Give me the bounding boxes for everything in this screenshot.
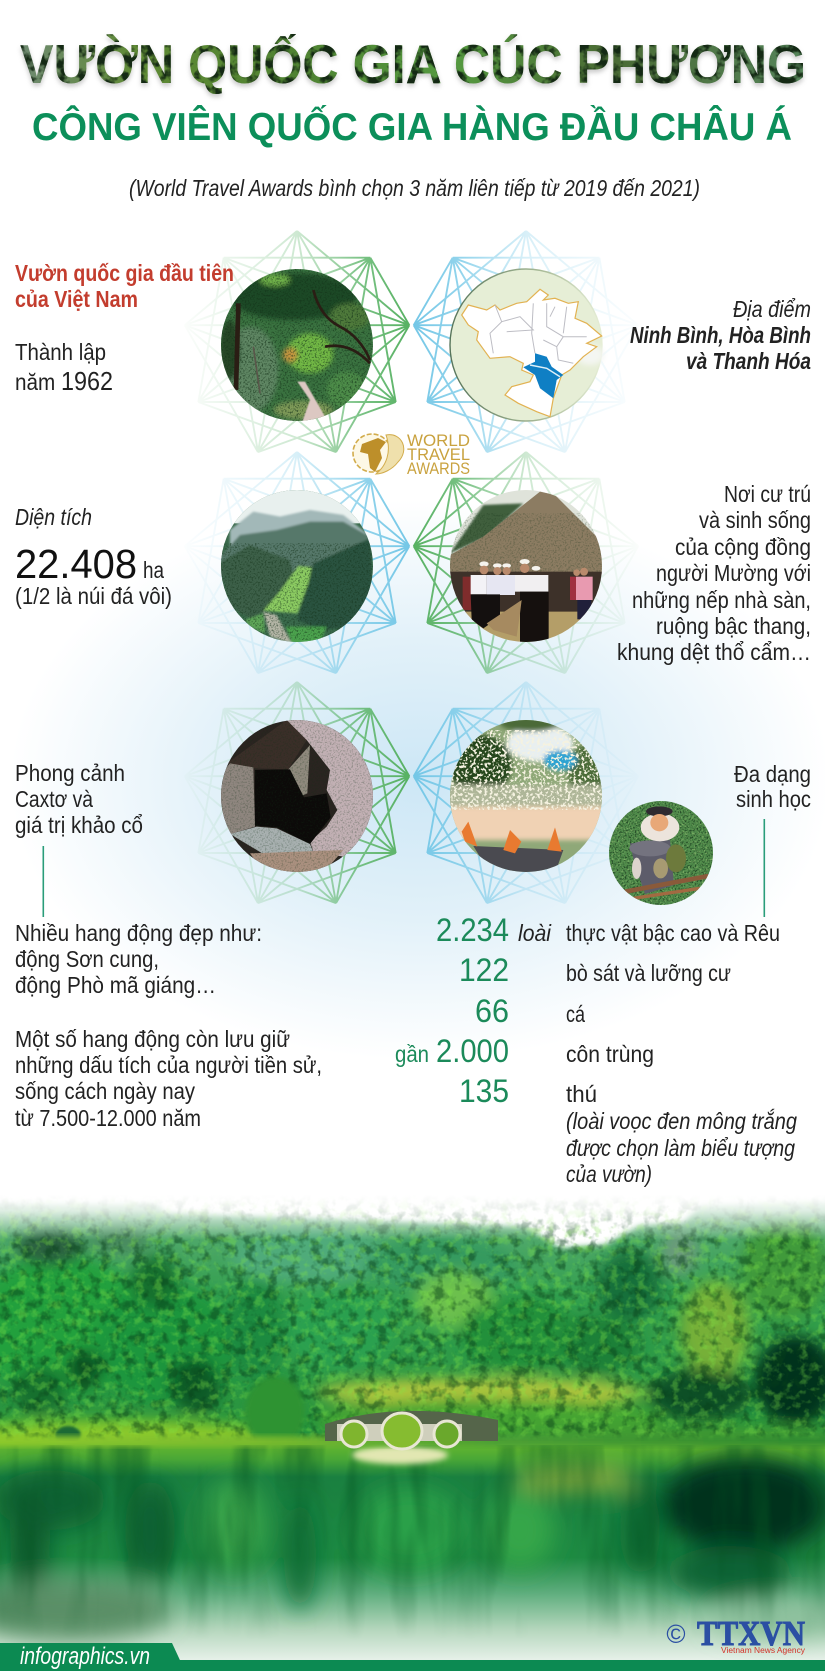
text block: first national park [15, 260, 234, 312]
species numbers: 2.000 [436, 1033, 509, 1069]
stalactites [288, 745, 310, 797]
text block: caves: động Sơn cung, [15, 946, 159, 972]
species labels: cá [566, 1001, 585, 1027]
species numbers: loài [518, 920, 552, 946]
footer bar [0, 1643, 825, 1671]
grass bank left [0, 1420, 280, 1452]
star pattern: row 1 left [185, 231, 409, 452]
logo: World Travel Awards: TRAVEL [407, 445, 470, 464]
species numbers: 2.234 [436, 912, 509, 948]
photo: red-shanked douc langur [607, 800, 713, 907]
subtitle: CÔNG VIÊN QUỐC GIA HÀNG ĐẦU CHÂU Á [32, 104, 792, 149]
species numbers: 66 [475, 993, 509, 1029]
text block: area [15, 504, 172, 609]
lake water [0, 1441, 825, 1671]
monkey body [630, 840, 674, 894]
logo: TTXVN: Vietnam News Agency [721, 1646, 805, 1655]
text block: first national park: Vườn quốc gia đầu tiên [15, 260, 234, 286]
left wall [218, 763, 255, 834]
white mist at top of photo [0, 1195, 825, 1240]
cave ceiling [227, 720, 307, 769]
logo: World Travel Awards: WORLD [407, 431, 470, 450]
text block: prehistoric traces: Một số hang động còn lưu giữ [15, 1026, 290, 1052]
text block: karst landscape: Phong cảnh [15, 760, 125, 786]
species labels: thú [566, 1081, 597, 1107]
text block: karst landscape: giá trị khảo cổ [15, 812, 143, 838]
text block: prehistoric traces: từ 7.500-12.000 năm [15, 1105, 201, 1131]
photo: forest road [217, 267, 377, 427]
connector line left [42, 846, 44, 917]
map: location of the park [450, 269, 604, 421]
logo: TTXVN: © [666, 1619, 686, 1649]
shoreline blend [0, 1436, 825, 1446]
caption: awards note: (World Travel Awards bình chọn 3 năm liên tiếp từ 2019 đến 2021) [129, 175, 700, 201]
species numbers [395, 912, 552, 1109]
text block: prehistoric traces [15, 1026, 322, 1131]
text block: Muong community: và sinh sống [699, 507, 811, 533]
species labels: bò sát và lưỡng cư [566, 960, 731, 986]
text block: prehistoric traces: những dấu tích của người tiền sử, [15, 1052, 322, 1078]
text block: Muong community: Nơi cư trú [724, 481, 811, 507]
logo emblem [353, 434, 404, 474]
text block: first national park: của Việt Nam [15, 286, 138, 312]
star pattern: row 2 right [414, 452, 638, 673]
text block: prehistoric traces: sống cách ngày nay [15, 1078, 195, 1104]
hillside [450, 503, 523, 553]
text block: location: Địa điểm [733, 296, 811, 322]
footer source text: infographics.vn [20, 1643, 150, 1670]
species labels: (loài voọc đen mông trắng [566, 1108, 797, 1134]
text block: karst landscape: Caxtơ và [15, 786, 93, 812]
logo: World Travel Awards [353, 431, 470, 478]
text block: area: ha [143, 557, 164, 583]
text block: area: (1/2 là núi đá vôi) [15, 583, 172, 609]
ground [250, 850, 344, 872]
photo: Muong stilt house and people [447, 487, 607, 647]
cave floor rocks [230, 827, 314, 854]
footer tab [0, 1643, 185, 1671]
yellow-green hedge [315, 1378, 645, 1406]
text block: founded: năm 1962 [15, 366, 113, 396]
star pattern: row 3 left [185, 682, 409, 903]
trunks and branches [236, 290, 370, 393]
dark chamber [255, 769, 331, 844]
text block: area: Diện tích [15, 504, 92, 530]
text block: biodiversity [734, 761, 811, 812]
pale right wall [286, 717, 375, 857]
map: northern Vietnam provinces [462, 289, 602, 417]
house shade [447, 572, 607, 613]
text block: karst landscape [15, 760, 143, 838]
logo: TTXVN [666, 1614, 805, 1655]
photo: flowers [450, 720, 602, 872]
star pattern: row 2 left [185, 452, 409, 673]
text block: biodiversity: sinh học [736, 786, 811, 812]
star pattern: row 3 right [414, 682, 638, 903]
text block: area: 22.408 [15, 541, 137, 587]
text block: location [630, 296, 811, 374]
forest [0, 1195, 825, 1460]
photo: limestone valley [217, 487, 377, 647]
text block: founded [15, 339, 113, 396]
connector line right [764, 819, 765, 917]
species labels: của vườn) [566, 1161, 652, 1187]
text block: Muong community: khung dệt thổ cẩm… [617, 639, 811, 665]
gravel [473, 846, 563, 873]
small shrub on bank [55, 1426, 81, 1444]
map: sea haze [576, 345, 604, 365]
species numbers: gần [395, 1041, 429, 1067]
text block: Muong community [617, 481, 811, 665]
photo: cave [217, 717, 377, 877]
branches [625, 876, 708, 892]
text block: caves [15, 920, 262, 998]
species numbers: 135 [459, 1073, 509, 1109]
text block: biodiversity: Đa dạng [734, 761, 811, 787]
forest road surface [297, 382, 325, 423]
species numbers: 122 [459, 952, 509, 988]
species labels: côn trùng [566, 1041, 654, 1067]
panel: lake landscape photo [0, 1195, 825, 1671]
grass bank right [622, 1408, 825, 1437]
logo: World Travel Awards: AWARDS [407, 459, 470, 478]
monkey head [641, 813, 679, 841]
map: highlighted provinces [523, 353, 563, 398]
orange flower cones [462, 822, 562, 853]
text block: Muong community: của cộng đồng [675, 534, 811, 560]
bridge [325, 1411, 498, 1449]
species labels: thực vật bậc cao và Rêu [566, 920, 780, 946]
people in traditional dress [463, 559, 593, 642]
text block: caves: Nhiều hang động đẹp như: [15, 920, 262, 946]
yard [465, 612, 587, 642]
thatched roof [450, 492, 603, 575]
riverside bush [245, 1376, 305, 1448]
text block: Muong community: ruộng bậc thang, [656, 613, 811, 639]
star pattern: row 1 right [414, 231, 638, 452]
logo: TTXVN: TTXVN [697, 1614, 805, 1653]
species labels [566, 920, 797, 1187]
text block: founded: Thành lập [15, 339, 106, 365]
text block: caves: động Phò mã giáng… [15, 972, 216, 998]
